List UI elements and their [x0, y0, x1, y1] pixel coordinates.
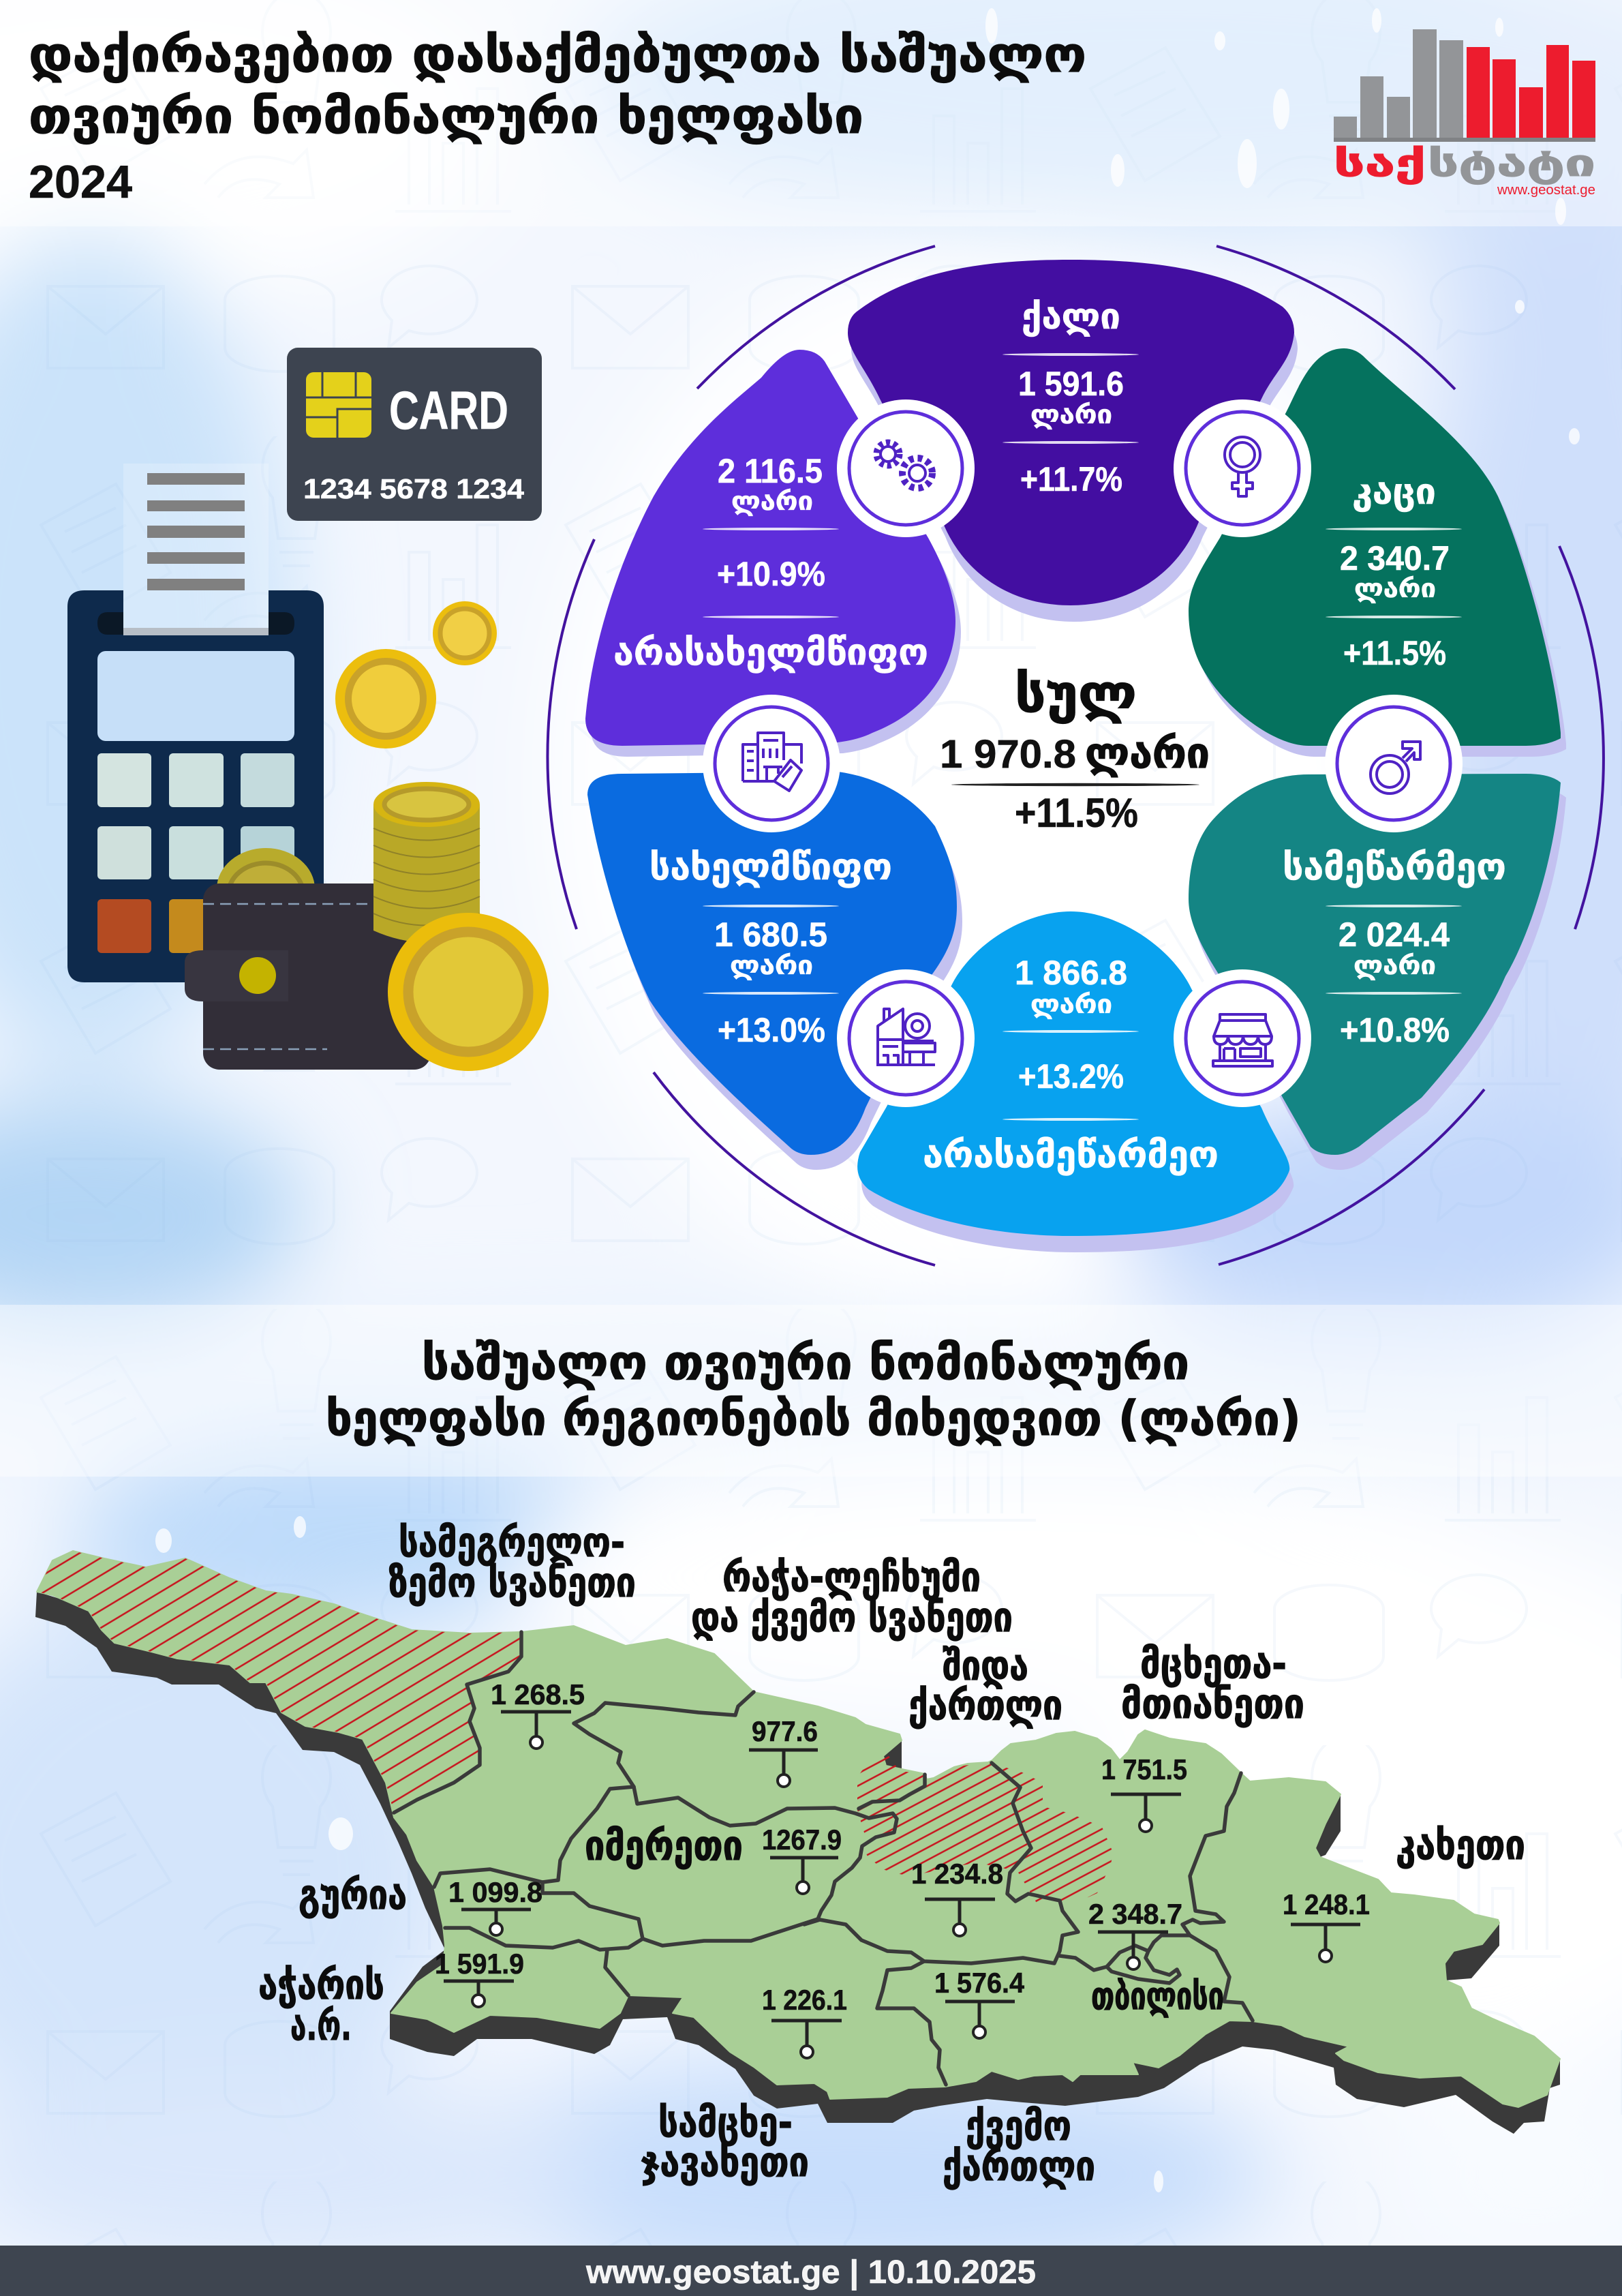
pin: Samtskhe 1226.1: 1 226.1: [762, 1984, 847, 2016]
region labels: სამეგრელო-: [399, 1519, 625, 1567]
region labels: ქვემო: [966, 2102, 1071, 2150]
pin: Kvemo Kartli 1576.4: [934, 1967, 1025, 2038]
panel: men: ლარი: [1354, 573, 1436, 603]
region labels: კახეთი: [1396, 1822, 1525, 1869]
illustration: credit card: 1234 5678 1234: [303, 473, 524, 504]
panel: non-state: არასახელმწიფო: [613, 631, 928, 674]
panel: non-business: +13.2%: [1018, 1057, 1124, 1096]
outer ring arcs: [547, 246, 1604, 1265]
pin: Imereti 1267.9: [762, 1824, 842, 1894]
pin: Mtskheta 1751.5: 1 751.5: [1101, 1753, 1187, 1785]
map pins with values: [435, 1678, 1370, 2058]
pin: Tbilisi 2348.7: [1088, 1898, 1182, 1969]
region labels: თბილისი: [1091, 1974, 1224, 2019]
illustration: credit card: CARD: [389, 380, 508, 440]
icon: female: [1174, 399, 1311, 537]
panel: business: სამეწარმეო: [1283, 845, 1506, 888]
panel: business: ლარი: [1353, 950, 1436, 980]
map: hatched occupied Abkhazia: [37, 1551, 521, 1813]
pin: Guria 1099.8: 1 099.8: [448, 1876, 542, 1908]
panel: men: 2 340.7: [1340, 539, 1450, 577]
pin: Kvemo Kartli 1576.4: 1 576.4: [934, 1967, 1025, 1999]
panel: non-state: [585, 350, 955, 746]
panel: state: 1 680.5: [714, 916, 827, 954]
panel: state: სახელმწიფო: [649, 845, 892, 888]
pin: Racha 977.6: 977.6: [752, 1715, 818, 1747]
region labels: აჭარის: [258, 1961, 384, 2009]
illustration: coin stack: [373, 782, 480, 942]
center total: სულ: [1015, 663, 1137, 724]
panel: non-business: არასამეწარმეო: [923, 1133, 1219, 1176]
logo: geostat: www.geostat.ge: [1497, 183, 1595, 198]
panel: non-state: +10.9%: [717, 555, 825, 593]
center total: 1 970.8: [940, 732, 1076, 776]
logo: geostat: სტატი: [1428, 142, 1595, 185]
pin: Racha 977.6: [749, 1715, 818, 1787]
region labels: ჯავახეთი: [641, 2139, 809, 2186]
title: დაქირავებით დასაქმებულთა საშუალო: [29, 26, 1086, 83]
panel: state: ლარი: [730, 950, 813, 980]
panel: business: 2 024.4: [1338, 916, 1450, 954]
pin: Kakheti 1248.1: [1283, 1888, 1370, 1962]
pin: Samegrelo 1268.5: [491, 1678, 585, 1749]
pin: Guria 1099.8: [448, 1876, 542, 1935]
illustration: payment terminal: [67, 464, 324, 982]
icon: gears: [837, 399, 975, 537]
header band: [0, 0, 1622, 226]
panel: women: ლარი: [1030, 399, 1112, 429]
title: 2024: [29, 156, 132, 208]
map: land: [37, 1551, 1560, 2107]
footer: www.geostat.ge | 10.10.2025: [585, 2254, 1036, 2291]
panel: state: +13.0%: [718, 1011, 825, 1049]
section title: [326, 1335, 1301, 1447]
panel: non-business: ლარი: [1030, 989, 1112, 1019]
pin: Samtskhe 1226.1: [762, 1984, 847, 2058]
region labels: მცხეთა-: [1140, 1640, 1287, 1688]
panel: non-business: [857, 911, 1289, 1236]
map: hatched occupied Tskhinvali region: [857, 1752, 1113, 1904]
logo: geostat: საქ: [1334, 142, 1426, 185]
region labels: ქართლი: [943, 2143, 1095, 2190]
pin: Tbilisi 2348.7: 2 348.7: [1088, 1898, 1182, 1930]
icon: shop: [1174, 969, 1311, 1107]
region labels: ა.რ.: [290, 2002, 352, 2050]
illustration: flying coins: [217, 601, 497, 930]
panel: women: +11.7%: [1020, 460, 1122, 498]
icon: male: [1325, 695, 1463, 832]
center total: [940, 663, 1210, 836]
panel: non-state: 2 116.5: [718, 452, 823, 490]
panel: men: +11.5%: [1343, 634, 1446, 672]
petal shadows: [591, 276, 1566, 1252]
map of Georgia: [35, 1551, 1560, 2134]
pin: Shida Kartli 1234.8: [911, 1858, 1003, 1936]
illustration: wallet: [185, 883, 431, 1070]
map: region borders: [394, 1632, 1253, 2085]
pin: Adjara 1591.9: [435, 1948, 524, 2007]
region labels: და ქვემო სვანეთი: [691, 1594, 1013, 1642]
region labels: [258, 1519, 1525, 2190]
panel: women: ქალი: [1022, 297, 1120, 337]
illustration: credit card: [287, 348, 542, 521]
section band: [0, 1305, 1622, 1477]
region labels: ზემო სვანეთი: [388, 1559, 636, 1607]
icon: state building: [703, 695, 840, 832]
section title: ხელფასი რეგიონების მიხედვით (ლარი): [326, 1391, 1301, 1447]
panel: non-business: 1 866.8: [1015, 954, 1127, 992]
illustration: big coin: [388, 913, 549, 1071]
panel: state: [587, 772, 957, 1155]
panel: business: [1189, 774, 1561, 1155]
panel: non-state: ლარი: [731, 486, 813, 516]
section title: საშუალო თვიური ნომინალური: [422, 1335, 1189, 1391]
panel: women: [848, 260, 1294, 605]
center total: ლარი: [1085, 728, 1210, 778]
region labels: მთიანეთი: [1121, 1680, 1304, 1728]
pin: Adjara 1591.9: 1 591.9: [435, 1948, 524, 1980]
pin: Imereti 1267.9: 1267.9: [762, 1824, 842, 1856]
region labels: რაჭა-ლეჩხუმი: [722, 1554, 981, 1601]
footer: [0, 2246, 1622, 2296]
pin: Mtskheta 1751.5: [1101, 1753, 1187, 1832]
icon: factory: [837, 969, 975, 1107]
region labels: სამცხე-: [658, 2099, 793, 2147]
title: [29, 26, 1086, 208]
panel: women: 1 591.6: [1018, 365, 1124, 403]
pin: Kakheti 1248.1: 1 248.1: [1283, 1888, 1370, 1920]
logo: geostat: [1334, 29, 1595, 198]
region labels: იმერეთი: [585, 1822, 743, 1870]
title: თვიური ნომინალური ხელფასი: [29, 87, 863, 145]
map: dark relief: [35, 1592, 1560, 2134]
panel: men: [1189, 348, 1561, 746]
panel: business: +10.8%: [1340, 1011, 1450, 1049]
pin: Samegrelo 1268.5: 1 268.5: [491, 1678, 585, 1710]
center total: +11.5%: [1015, 790, 1138, 836]
region labels: შიდა: [943, 1642, 1028, 1690]
pin: Shida Kartli 1234.8: 1 234.8: [911, 1858, 1003, 1890]
region labels: გურია: [299, 1871, 407, 1919]
region labels: ქართლი: [908, 1682, 1062, 1729]
panel: men: კაცი: [1352, 472, 1436, 513]
